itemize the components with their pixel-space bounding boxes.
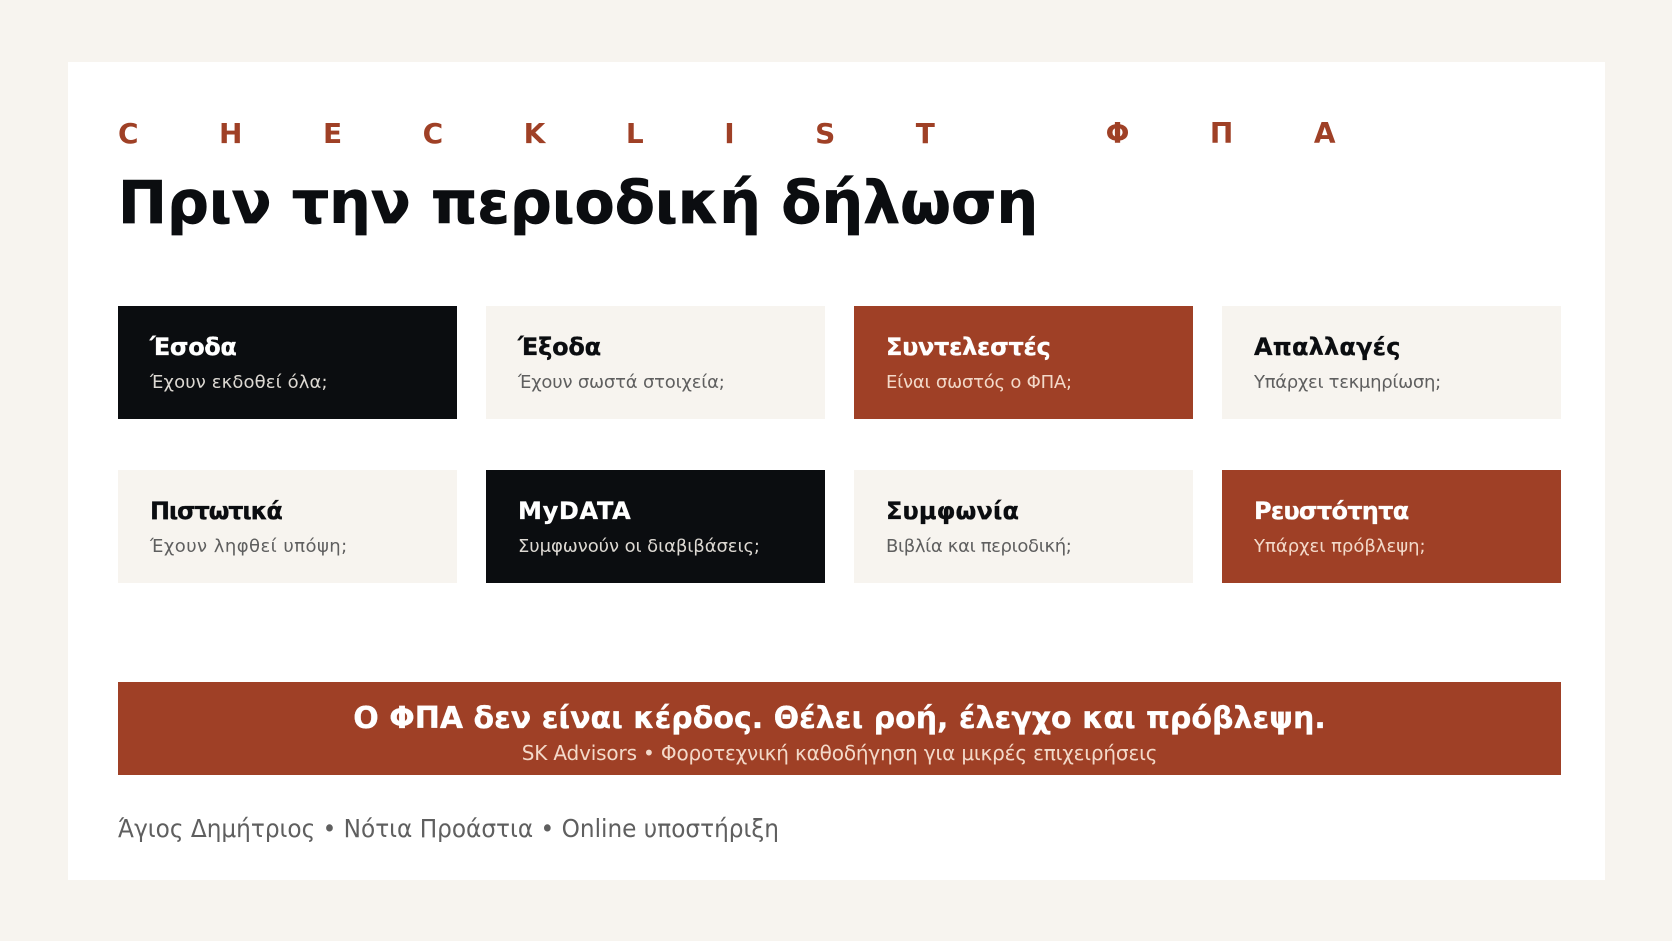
card: Πιστωτικά: Έχουν ληφθεί υπόψη; — [150, 536, 348, 557]
card: Ρευστότητα: Ρευστότητα — [1254, 497, 1408, 525]
card: MyDATA: Συμφωνούν οι διαβιβάσεις; — [518, 536, 760, 557]
title: Πριν την περιοδική δήλωση — [118, 169, 1038, 237]
card: Συμφωνία: Συμφωνία — [886, 497, 1019, 525]
card: Έσοδα — [118, 306, 457, 419]
card: Συντελεστές — [854, 306, 1193, 419]
card: Πιστωτικά — [118, 470, 457, 583]
footer: locations: Άγιος Δημήτριος • Νότια Προάστια • Online υποστήριξη — [118, 814, 779, 843]
card: Συμφωνία: Βιβλία και περιοδική; — [886, 536, 1071, 557]
card: Έξοδα: Έξοδα — [518, 333, 601, 361]
card: Απαλλαγές: Υπάρχει τεκμηρίωση; — [1254, 372, 1441, 393]
banner: key message — [118, 682, 1561, 775]
card: Έξοδα: Έχουν σωστά στοιχεία; — [518, 372, 725, 393]
card: Συντελεστές: Συντελεστές — [886, 333, 1050, 361]
card: Πιστωτικά: Πιστωτικά — [150, 497, 282, 525]
panel: white sheet — [68, 62, 1605, 880]
card: Απαλλαγές: Απαλλαγές — [1254, 333, 1401, 361]
card: Απαλλαγές — [1222, 306, 1561, 419]
card: MyDATA: MyDATA — [518, 497, 631, 525]
card: Έσοδα: Έχουν εκδοθεί όλα; — [150, 372, 328, 393]
eyebrow: checklist label: CHECKLIST ΦΠΑ — [118, 117, 1416, 150]
card: Συντελεστές: Είναι σωστός ο ΦΠΑ; — [886, 372, 1072, 393]
card: Ρευστότητα: Υπάρχει πρόβλεψη; — [1254, 536, 1426, 557]
card: Έξοδα — [486, 306, 825, 419]
banner: key message: Ο ΦΠΑ δεν είναι κέρδος. Θέλει ροή, έλεγχο και πρόβλεψη. — [353, 701, 1326, 736]
card: MyDATA — [486, 470, 825, 583]
card: Έσοδα: Έσοδα — [150, 333, 236, 361]
card: Συμφωνία — [854, 470, 1193, 583]
card: Ρευστότητα — [1222, 470, 1561, 583]
banner: key message: SK Advisors • Φοροτεχνική καθοδήγηση για μικρές επιχειρήσεις — [522, 741, 1157, 765]
